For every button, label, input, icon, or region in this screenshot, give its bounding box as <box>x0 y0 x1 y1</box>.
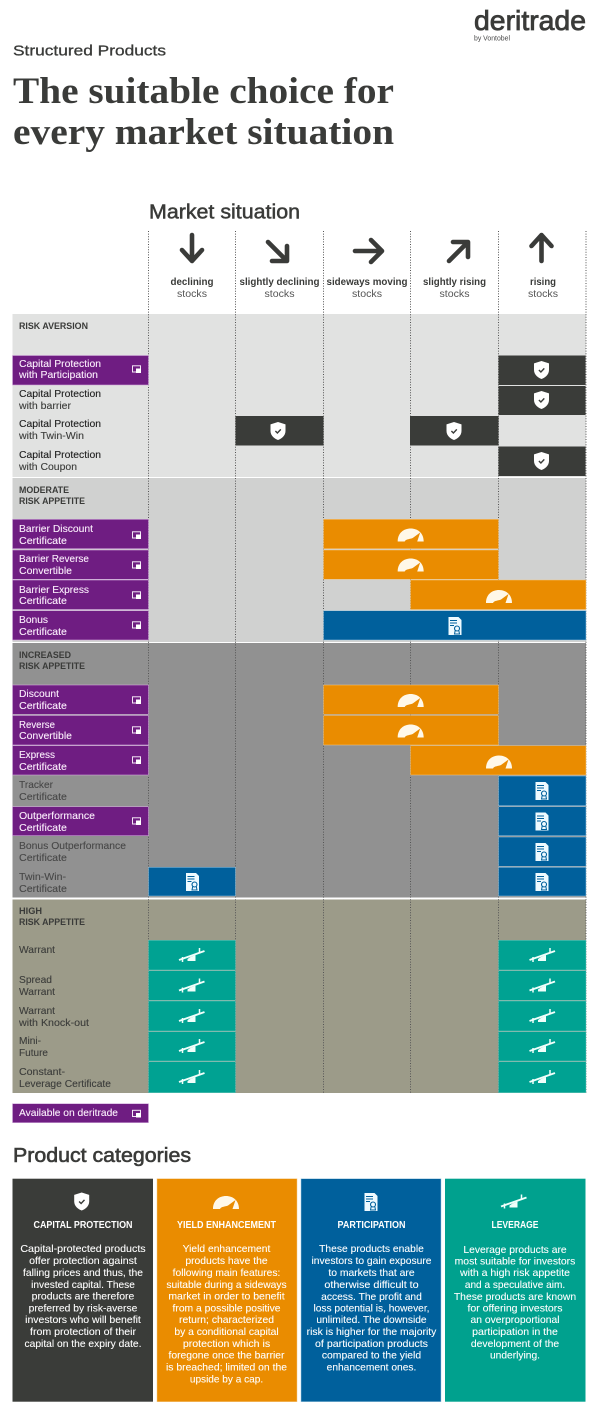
card: yield enhancement: protection which is <box>183 1339 270 1350</box>
column header: slightly rising: slightly rising <box>423 277 486 288</box>
panel: risk aversion <box>12 320 586 476</box>
legend: available on deritrade <box>12 1104 148 1123</box>
card: leverage <box>445 1179 586 1402</box>
row: capital protection with twin-win: with Twin-Win <box>18 431 84 442</box>
row: discount certificate <box>12 685 148 714</box>
row: reverse convertible: Convertible <box>19 731 72 742</box>
card: yield enhancement: foregone once the barrier <box>168 1351 285 1362</box>
row: mini-future: Mini- <box>19 1036 41 1047</box>
row: discount certificate: Discount <box>19 689 59 700</box>
row: capital protection with participation <box>12 356 148 385</box>
row: constant-leverage certificate <box>19 1067 111 1090</box>
card: yield enhancement: upside by a cap. <box>190 1374 263 1386</box>
card: leverage: and a speculative aim. <box>465 1280 565 1291</box>
title: every market situation <box>13 111 394 152</box>
column header: rising: rising <box>530 277 556 288</box>
column header: slightly declining: slightly declining <box>240 277 320 288</box>
row: barrier reverse convertible: Convertible <box>19 566 72 577</box>
logo: deritrade: by Vontobel <box>474 36 510 42</box>
row: capital protection with coupon: with Coupon <box>18 462 77 473</box>
card: leverage: Leverage products are <box>463 1245 567 1256</box>
row: reverse convertible <box>12 716 148 745</box>
card: yield enhancement: products have the <box>185 1256 268 1267</box>
card: yield enhancement: from a possible positive <box>172 1304 281 1314</box>
column header: declining: declining <box>170 277 214 288</box>
heading: product categories: Product categories <box>13 1145 191 1167</box>
card: participation: enhancement ones. <box>327 1362 416 1374</box>
row: barrier reverse convertible: Barrier Reverse <box>19 554 89 565</box>
card: leverage: development of the <box>471 1339 559 1350</box>
card: yield enhancement: by a conditional capital <box>174 1327 279 1338</box>
row: warrant with knock-out: with Knock-out <box>18 1018 89 1029</box>
bars: increased <box>148 685 586 896</box>
heading: increased risk appetite <box>19 649 85 671</box>
row: barrier express certificate <box>12 580 148 610</box>
card: leverage: underlying. <box>490 1351 540 1362</box>
heading: high risk appetite <box>19 905 85 927</box>
row: bonus outperformance certificate <box>19 841 126 864</box>
card: leverage: participation in the <box>472 1327 558 1338</box>
row: capital protection with barrier: Capital Protection <box>19 389 101 400</box>
bars: high <box>148 940 586 1093</box>
heading: increased risk appetite: INCREASED <box>19 649 71 660</box>
row: spread warrant: Spread <box>19 975 52 986</box>
heading: moderate risk appetite: RISK APPETITE <box>19 495 85 506</box>
card: participation: to markets that are <box>328 1268 415 1279</box>
row: capital protection with coupon <box>18 450 101 473</box>
card: yield enhancement: return; characterized <box>179 1315 274 1326</box>
column header: rising <box>528 235 558 300</box>
card: leverage: an overproportional <box>470 1315 560 1326</box>
card: capital protection: invested capital. These <box>31 1280 135 1291</box>
card: yield enhancement: market in order to benefit <box>168 1292 285 1302</box>
card: yield enhancement: Yield enhancement <box>183 1244 271 1255</box>
row: tracker certificate <box>19 780 67 803</box>
row: bonus certificate: Certificate <box>19 627 67 638</box>
row: barrier discount certificate: Barrier Discount <box>19 524 93 535</box>
card: yield enhancement: following main features: <box>173 1268 280 1279</box>
heading: increased risk appetite: RISK APPETITE <box>19 660 85 671</box>
row: reverse convertible: Reverse <box>19 720 55 731</box>
row: constant-leverage certificate: Constant- <box>19 1067 65 1078</box>
row: capital protection with twin-win <box>18 419 101 442</box>
card: participation: loss potential is, however, <box>314 1304 430 1314</box>
card: participation: of participation products <box>315 1339 428 1350</box>
row: tracker certificate: Certificate <box>19 792 67 803</box>
logo: deritrade: deritrade <box>474 5 586 36</box>
bars: moderate <box>324 519 586 640</box>
row: capital protection with barrier: with barrier <box>18 401 72 412</box>
card: capital protection: capital on the expiry date. <box>24 1339 142 1350</box>
row: bonus outperformance certificate: Bonus Outperformance <box>19 841 126 852</box>
heading: high risk appetite: HIGH <box>19 905 42 916</box>
card: yield enhancement: suitable during a sideways <box>166 1280 287 1291</box>
row: bonus outperformance certificate: Certificate <box>19 853 67 864</box>
card: leverage: These products are known <box>454 1292 576 1303</box>
row: capital protection with barrier <box>18 389 101 412</box>
row: barrier discount certificate <box>12 519 148 549</box>
row: spread warrant: Warrant <box>19 987 55 998</box>
panel: high risk appetite <box>18 905 586 1093</box>
row: barrier express certificate: Certificate <box>19 596 67 607</box>
panel: increased risk appetite <box>12 649 586 896</box>
panel: moderate risk appetite <box>12 484 586 640</box>
card: leverage: LEVERAGE <box>492 1220 539 1231</box>
row: warrant: Warrant <box>19 945 55 956</box>
row: bonus certificate <box>12 611 148 640</box>
legend: available on deritrade: Available on deritrade <box>19 1108 118 1119</box>
heading: moderate risk appetite <box>19 484 85 506</box>
column header: slightly rising: stocks <box>440 289 470 300</box>
card: leverage: with a high risk appetite <box>459 1268 570 1279</box>
row: warrant with knock-out <box>18 1006 89 1029</box>
card: capital protection: preferred by risk-averse <box>29 1304 138 1314</box>
row: barrier express certificate: Barrier Express <box>19 585 89 596</box>
row: capital protection with participation: Capital Protection <box>19 359 101 370</box>
bars: capital protection <box>236 356 586 476</box>
row: bonus certificate: Bonus <box>19 615 48 626</box>
heading: Market situation: Market situation <box>149 202 300 224</box>
row: express certificate <box>12 746 148 775</box>
card: yield enhancement: is breached; limited on the <box>166 1362 287 1374</box>
card: participation: These products enable <box>319 1244 424 1255</box>
row: twin-win certificate: Certificate <box>19 884 67 895</box>
card: capital protection: from protection of their <box>30 1327 137 1338</box>
column header: rising: stocks <box>528 289 558 300</box>
row: barrier reverse convertible <box>12 550 148 579</box>
row: outperformance certificate: Certificate <box>19 823 67 834</box>
row: mini-future <box>19 1036 48 1059</box>
column header: slightly rising <box>423 242 486 300</box>
column header: sideways moving: sideways moving <box>326 277 408 288</box>
card: capital protection: investors who will benefit <box>25 1315 141 1326</box>
row: mini-future: Future <box>19 1048 48 1059</box>
card: participation: investors to gain exposure <box>312 1256 432 1267</box>
matrix bands <box>12 314 586 1093</box>
card: capital protection: products are therefore <box>32 1292 135 1302</box>
row: express certificate: Certificate <box>19 762 67 773</box>
card: leverage: for offering investors <box>468 1304 562 1314</box>
card: capital protection <box>12 1179 153 1402</box>
row: constant-leverage certificate: Leverage Certificate <box>19 1079 111 1090</box>
row: outperformance certificate <box>12 807 148 836</box>
card: participation: risk is higher for the majority <box>307 1327 437 1338</box>
card: yield enhancement <box>157 1179 297 1402</box>
row: capital protection with twin-win: Capital Protection <box>19 419 101 430</box>
card: yield enhancement: YIELD ENHANCEMENT <box>177 1220 276 1231</box>
row: capital protection with coupon: Capital Protection <box>19 450 101 461</box>
row: capital protection with participation: with Participation <box>18 370 98 381</box>
row: express certificate: Express <box>19 750 55 761</box>
card: participation: otherwise difficult to <box>324 1280 419 1291</box>
row: barrier discount certificate: Certificate <box>19 536 67 547</box>
title: The suitable choice for <box>13 70 394 111</box>
title <box>13 70 394 152</box>
card: participation: access. The profit and <box>321 1292 422 1303</box>
card: capital protection: offer protection against <box>29 1256 137 1267</box>
column header: slightly declining <box>240 242 320 300</box>
column header: slightly declining: stocks <box>264 289 294 300</box>
card: capital protection: CAPITAL PROTECTION <box>34 1220 132 1231</box>
column header: sideways moving: stocks <box>352 289 382 300</box>
heading: risk aversion: RISK AVERSION <box>19 320 88 331</box>
card: capital protection: Capital-protected products <box>20 1244 146 1255</box>
card: capital protection: falling prices and thus, the <box>23 1268 143 1279</box>
row: spread warrant <box>19 975 55 998</box>
row: tracker certificate: Tracker <box>19 780 54 791</box>
card: participation <box>301 1179 441 1402</box>
card: participation: compared to the yield <box>322 1351 421 1362</box>
column header: declining <box>170 235 214 300</box>
eyebrow: Structured Products: Structured Products <box>13 42 166 60</box>
heading: moderate risk appetite: MODERATE <box>19 484 69 495</box>
row: twin-win certificate <box>19 872 67 895</box>
row: warrant with knock-out: Warrant <box>19 1006 55 1017</box>
heading: high risk appetite: RISK APPETITE <box>19 916 85 927</box>
card: participation: unlimited. The downside <box>316 1315 427 1326</box>
card: leverage: most suitable for investors <box>455 1256 575 1268</box>
column header: sideways moving <box>326 240 408 300</box>
row: outperformance certificate: Outperformance <box>19 811 95 822</box>
row: twin-win certificate: Twin-Win- <box>19 872 66 883</box>
row: discount certificate: Certificate <box>19 701 67 712</box>
card: participation: PARTICIPATION <box>338 1220 406 1231</box>
column header: declining: stocks <box>177 289 207 300</box>
